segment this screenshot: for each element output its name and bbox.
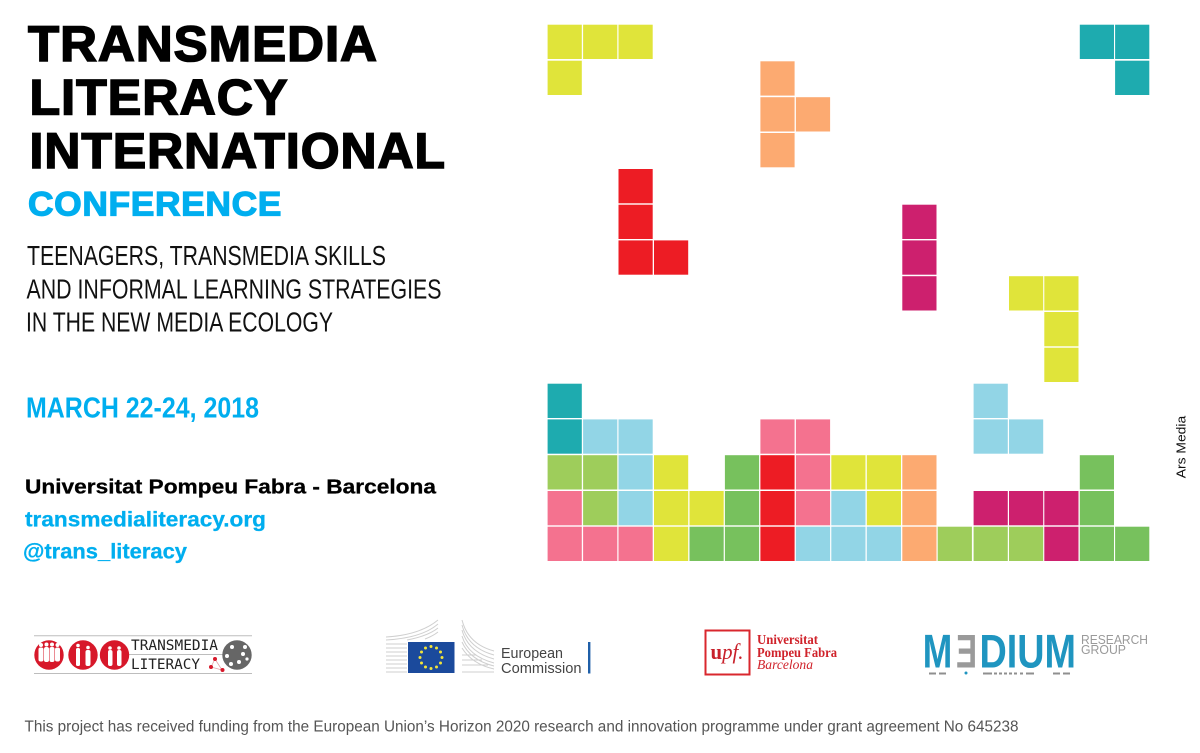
logo: Medium Research Group: RESEARCH (1081, 633, 1148, 647)
tetris piece: magenta (902, 205, 936, 310)
logo: Medium Research Group (923, 624, 1148, 677)
heading: conference: CONFERENCE (28, 185, 282, 223)
tetris piece: orange (760, 61, 830, 167)
subtitle: IN THE NEW MEDIA ECOLOGY (26, 307, 333, 338)
logo: Universitat Pompeu Fabra: upf. (710, 639, 744, 664)
tetris piece: red (618, 169, 688, 275)
logo: Transmedia Literacy: TRANSMEDIA (131, 638, 218, 654)
logo: European Commission: Commission (501, 660, 582, 677)
subtitle (26, 240, 442, 338)
subtitle: TEENAGERS, TRANSMEDIA SKILLS (27, 240, 386, 271)
website link: transmedialiteracy.org (25, 508, 266, 532)
tetris piece: teal top right (1080, 25, 1149, 95)
tetris piece: yellow right (1009, 276, 1078, 382)
logo: Medium Research Group: E (956, 624, 977, 677)
logo: Universitat Pompeu Fabra: Barcelona (757, 657, 813, 672)
logo: Medium Research Group: GROUP (1081, 643, 1126, 657)
logo: European Commission: European (501, 645, 563, 662)
logo: Transmedia Literacy (34, 636, 252, 674)
logo: Universitat Pompeu Fabra: Universitat (757, 632, 818, 647)
logo: Medium Research Group: DIUM (980, 624, 1076, 677)
twitter handle: @trans_literacy (23, 540, 187, 564)
subtitle: AND INFORMAL LEARNING STRATEGIES (26, 274, 442, 305)
title (28, 16, 446, 179)
logo: Medium Research Group: M (923, 624, 952, 677)
title: INTERNATIONAL (30, 123, 446, 179)
title: LITERACY (30, 70, 288, 126)
title: TRANSMEDIA (28, 16, 378, 72)
logo: Transmedia Literacy: LITERACY (131, 657, 200, 673)
tetris stack (548, 384, 1149, 561)
credit: Ars Media: Ars Media (1174, 415, 1188, 478)
venue: Universitat Pompeu Fabra - Barcelona (25, 475, 437, 498)
logo: Universitat Pompeu Fabra: Pompeu Fabra (757, 645, 837, 660)
logo: Universitat Pompeu Fabra (706, 630, 837, 674)
tetris piece: yellow top left (548, 25, 653, 95)
logo: European Commission (386, 620, 590, 677)
date: MARCH 22-24, 2018 (26, 393, 259, 425)
funding statement: This project has received funding from the European Union’s Horizon 2020 research and innovation programme under grant agreement No 645238 (24, 718, 1018, 736)
